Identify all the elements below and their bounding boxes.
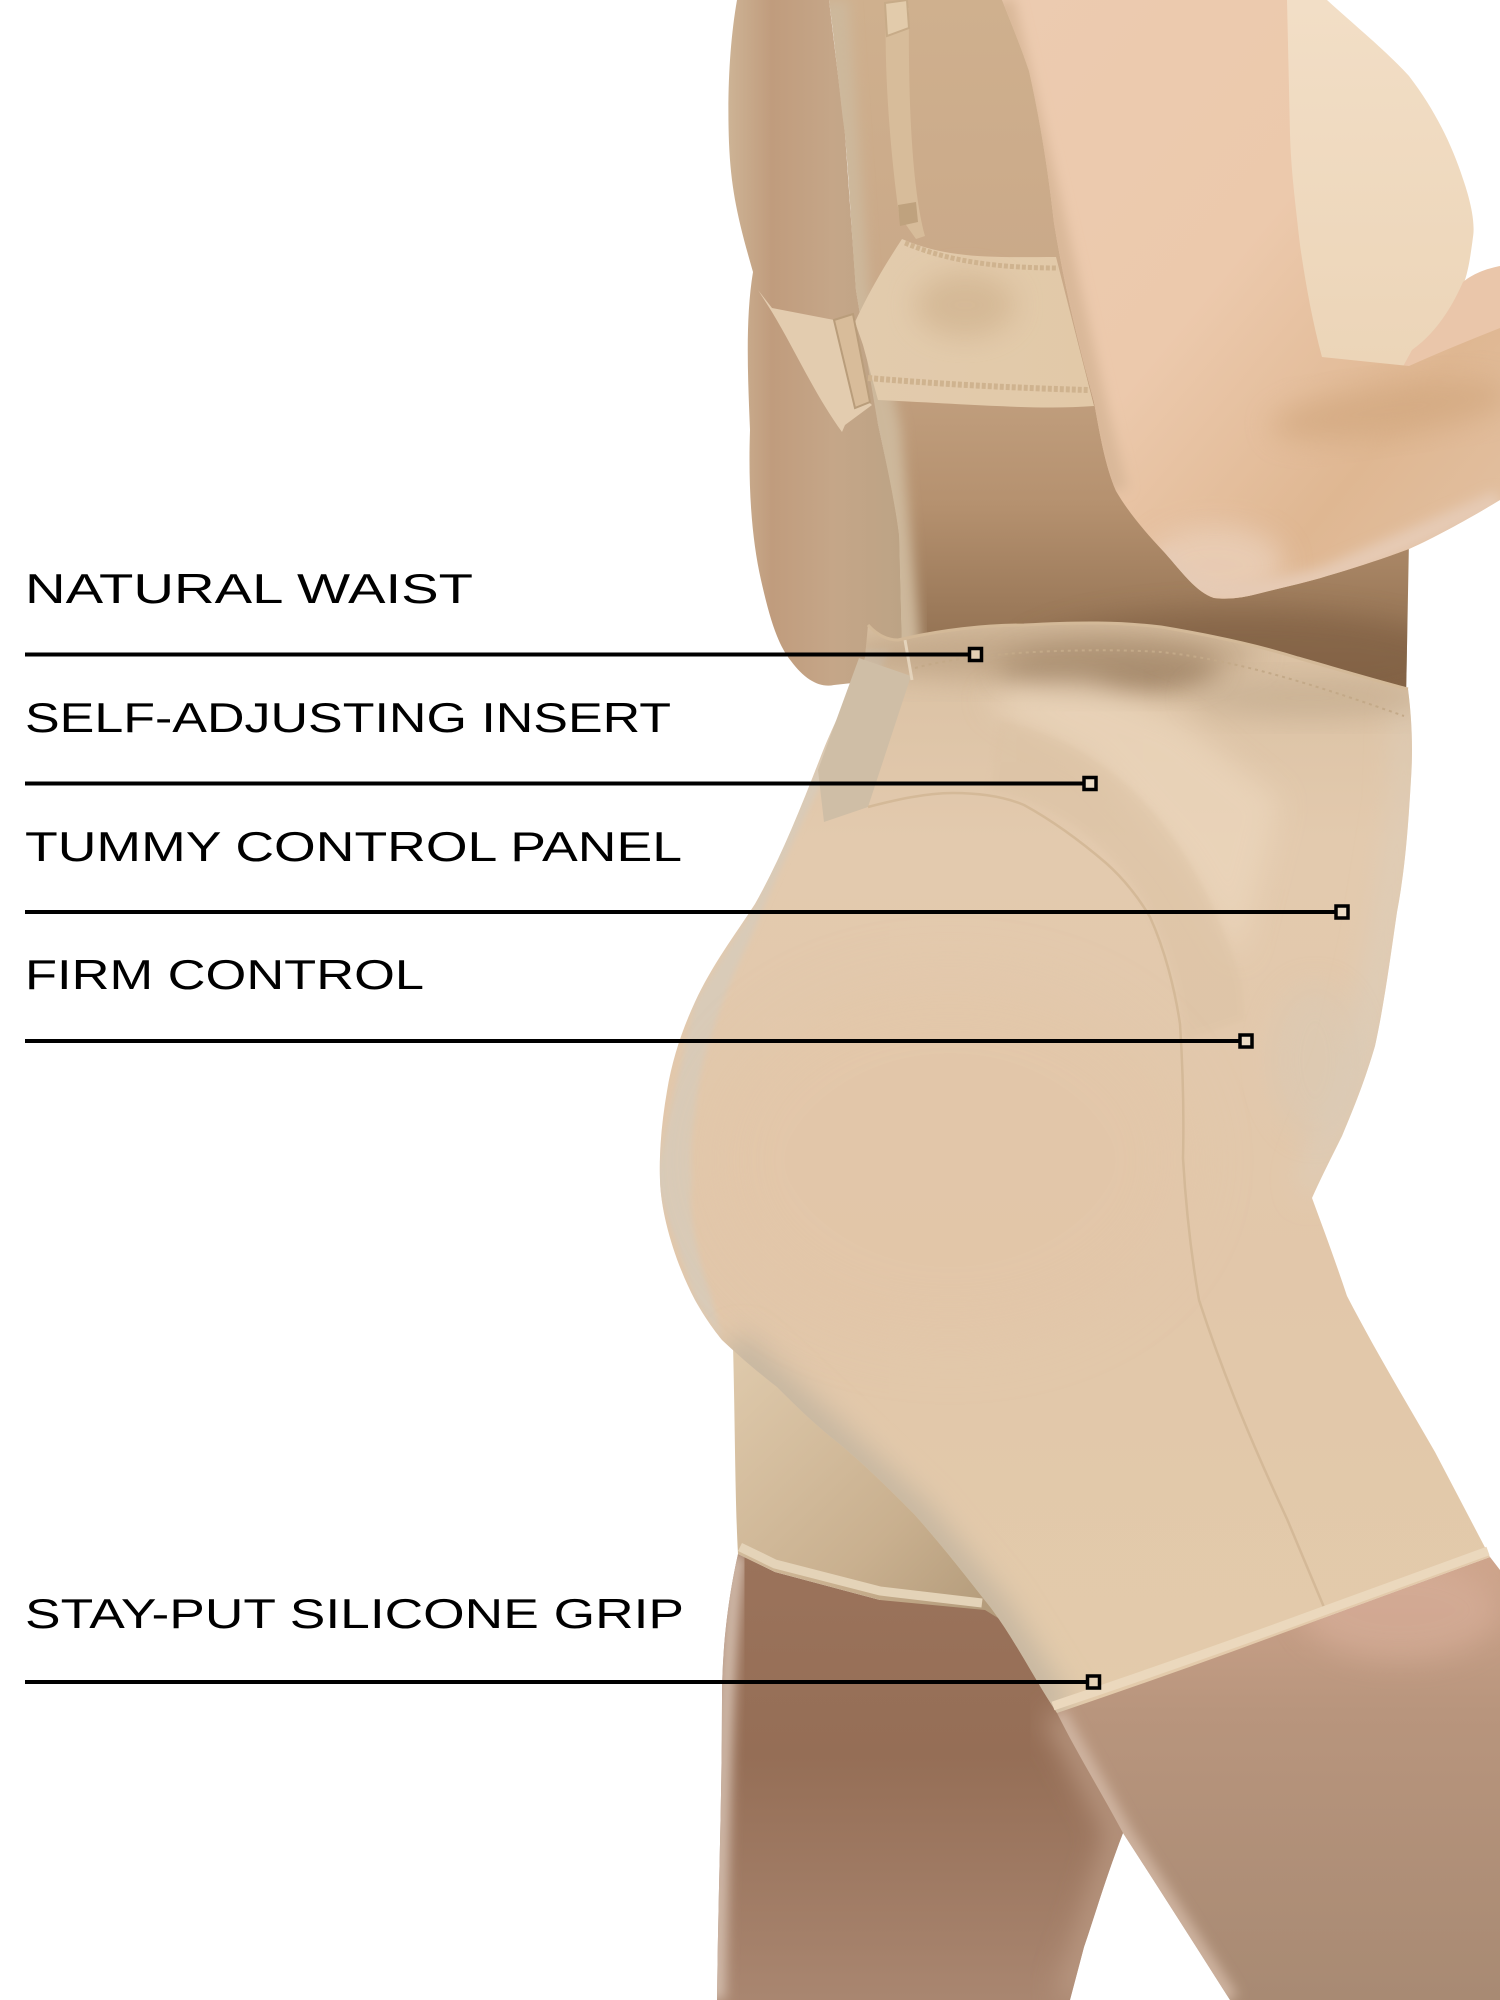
- product figure: [655, 0, 1500, 2000]
- band lower trim: [868, 378, 1088, 390]
- torso skin: [829, 0, 1409, 688]
- label: tummy control panel: TUMMY CONTROL PANEL: [25, 823, 682, 870]
- hip hollow shading: [1270, 985, 1360, 1135]
- bra cup: [1230, 0, 1474, 366]
- self-adjusting mesh insert: [818, 658, 911, 822]
- leader line: [25, 652, 975, 656]
- control panel seam: [868, 793, 1326, 1612]
- near leg skin: [1057, 1557, 1500, 2000]
- label: stay-put silicone grip: STAY-PUT SILICONE GRIP: [25, 1590, 684, 1637]
- label: firm control: FIRM CONTROL: [25, 951, 424, 998]
- near arm: [1002, 0, 1500, 605]
- center warmth: [710, 980, 1190, 1340]
- far leg hem: [740, 1547, 982, 1603]
- shorts far leg: [733, 1345, 1050, 1650]
- marker: [1088, 1676, 1100, 1688]
- callout: firm control: [25, 951, 1252, 1047]
- marker: [970, 648, 982, 660]
- waistband top edge: [868, 623, 1408, 689]
- leg hem: [1053, 1551, 1488, 1706]
- callout: natural waist: [25, 565, 982, 660]
- label: natural waist: NATURAL WAIST: [25, 565, 473, 612]
- ribbed panel band: [1162, 836, 1163, 837]
- marker: [1084, 778, 1096, 790]
- leader line: [25, 910, 1342, 914]
- band upper trim: [905, 243, 1058, 268]
- leader line: [25, 1680, 1093, 1684]
- waistband stitch: [915, 650, 1404, 716]
- leader line: [25, 782, 1090, 786]
- lower back edge shading: [730, 1345, 1057, 1715]
- bra strap: [885, 0, 925, 239]
- bra band: [758, 239, 1094, 432]
- leader line: [25, 1039, 1246, 1043]
- back band piece: [758, 290, 872, 432]
- light inner panel patch: [996, 668, 1268, 923]
- marker: [1336, 906, 1348, 918]
- callout: self-adjusting insert: [25, 694, 1096, 790]
- hand: [1400, 266, 1500, 372]
- shorts main body: [655, 623, 1490, 1715]
- far leg skin: [717, 1554, 1123, 2000]
- front edge highlight: [1323, 967, 1380, 1148]
- far arm: [728, 0, 902, 686]
- waistband shadow: [1000, 644, 1220, 692]
- callout: stay-put silicone grip: [25, 1590, 1100, 1688]
- marker: [1240, 1035, 1252, 1047]
- hook closure: [834, 314, 870, 408]
- back edge highlight: [655, 650, 890, 1340]
- label: self-adjusting insert: SELF-ADJUSTING INSERT: [25, 694, 671, 741]
- callout: tummy control panel: [25, 823, 1348, 918]
- vertical seam at waistband: [905, 640, 912, 680]
